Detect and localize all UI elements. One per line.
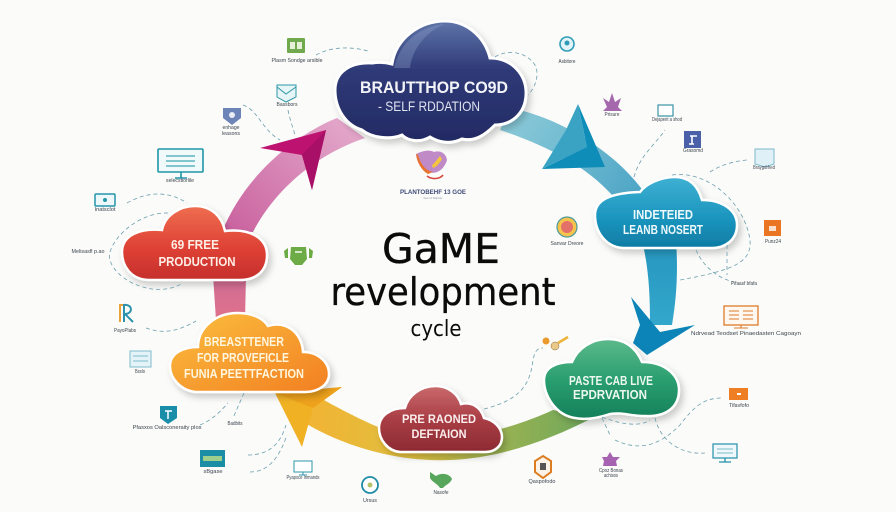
- cloud text: PRE RAONED: [402, 412, 476, 426]
- icon: orange chat: Punz24: [765, 239, 781, 245]
- cloud text: INDETEIED: [633, 208, 693, 222]
- icon: gear circle: [362, 477, 378, 504]
- cloud title: BRAUTTHOP CO9D: [360, 79, 508, 97]
- icon: text box: [130, 351, 151, 375]
- cloud: red: PRODUCTION: [158, 254, 236, 269]
- icon: teal monitor: [652, 105, 682, 123]
- icon: shield: leasons: [222, 131, 240, 137]
- icon: orange hexagon: [528, 456, 556, 485]
- cloud: navy: [335, 21, 526, 142]
- arrow: teal band and head: [500, 104, 644, 195]
- cloud text: PASTE CAB LIVE: [569, 374, 653, 388]
- icon: teal monitor: Dejapent a shod: [652, 117, 682, 123]
- icon: teal shield: [132, 406, 202, 431]
- center logo: PLANTOBEHF 13 GOE: [400, 189, 467, 196]
- icon: green gamepad: [284, 247, 313, 265]
- title: GaME: [382, 225, 500, 273]
- icon: large teal monitor: [158, 149, 203, 184]
- icon: shield: [222, 108, 241, 137]
- icon: small teal laptop: [94, 194, 116, 213]
- cloud: maroon: DEFTAION: [412, 427, 466, 441]
- center logo: bus of Startup: [424, 196, 443, 200]
- icon: purple star: Cpoz Bonas: [599, 468, 623, 474]
- icon: shield: enhage: [222, 125, 240, 131]
- arrow: green to yellow band and head: [275, 387, 592, 460]
- icon: teal shield: Pfasxos Oalsconeraity plos: [132, 425, 202, 431]
- icon: teal desktop: [713, 444, 737, 462]
- icon: screen: sBgase: [204, 469, 222, 475]
- title: [330, 225, 556, 342]
- icon: small teal laptop: Inatsclot: [94, 207, 116, 213]
- icon: R logo: PayoPlabs: [114, 328, 136, 334]
- icon: large teal monitor: selecstiorlile: [166, 178, 194, 184]
- cloud text: BREASTTENER: [204, 335, 284, 349]
- arrow: pink band and head: [222, 118, 365, 232]
- cloud text: 69 FREE: [171, 237, 219, 252]
- icon: key: [542, 337, 568, 350]
- icon: green bird: [430, 472, 452, 496]
- icon: blue bulb: Asbitore: [558, 59, 576, 65]
- icon: green grid: Plasm Sondge arsible: [272, 58, 322, 64]
- icon: gear circle: Ursus: [363, 498, 377, 504]
- icon: orange hexagon: Qaspofodo: [528, 479, 556, 485]
- icon: green bird: Nasofe: [434, 490, 448, 496]
- dashed connectors: [109, 48, 750, 472]
- icon: R logo: [114, 305, 136, 334]
- cloud: green: [544, 339, 679, 419]
- label: Melisasfl p.ao: [72, 249, 104, 255]
- icon: green grid: [272, 38, 322, 64]
- cloud subtitle: - SELF RDDATION: [378, 98, 480, 114]
- arrow: cyan band and head: [631, 240, 695, 355]
- icon: circle badge: Sanvar Dreore: [550, 241, 584, 247]
- cloud: teal: LEANB NOSERT: [623, 223, 703, 237]
- icon: blue music square: Grasomd: [683, 148, 703, 154]
- label: Pifaasf bfafa: [731, 281, 758, 287]
- icon: screen: [200, 450, 225, 475]
- icon: book: Braygdrhed: [753, 165, 775, 171]
- arrow: rose band between red and orange clouds: [213, 275, 246, 320]
- cloud: orange: FUNIA PEETTFACTION: [184, 367, 304, 381]
- icon: teal envelope: Bassbors: [276, 102, 298, 108]
- icon: purple star: [599, 452, 623, 479]
- cloud: teal: [595, 177, 737, 248]
- label: Badbits: [228, 421, 243, 427]
- icon: orange chat: [764, 220, 781, 245]
- icon: blue bulb: [558, 37, 576, 65]
- icon: purple star: achisos: [604, 473, 618, 479]
- icon: teal envelope: [276, 85, 298, 108]
- cloud: orange: FOR PROVEFICLE: [197, 351, 289, 365]
- icon: circle badge: [550, 217, 584, 247]
- cloud highlight: [394, 24, 445, 68]
- cloud: orange: [170, 313, 329, 392]
- icon: orange monitor: Ndrvead Teodset Pinaedasten Cagoayn: [691, 331, 801, 337]
- icon: text box: Bsslo: [135, 369, 145, 375]
- icon: monitor outline: [286, 461, 320, 481]
- icon: purple lamp: Prisure: [604, 112, 620, 118]
- icon: orange monitor: [691, 306, 801, 337]
- icon: book: [753, 149, 775, 171]
- title: revelopment: [330, 270, 556, 314]
- icon: monitor outline: Pyapsce Inmands: [286, 475, 320, 481]
- cloud: green: EPDRVATION: [573, 388, 647, 402]
- icon: orange tile: Tifavfofo: [729, 403, 749, 409]
- icon: purple lamp: [603, 93, 622, 118]
- cloud: red: [122, 206, 267, 280]
- center logo: [400, 151, 467, 200]
- cloud: maroon: [379, 386, 502, 452]
- icon: orange tile: [729, 388, 749, 409]
- icon: blue music square: [683, 131, 703, 154]
- title: cycle: [410, 317, 462, 342]
